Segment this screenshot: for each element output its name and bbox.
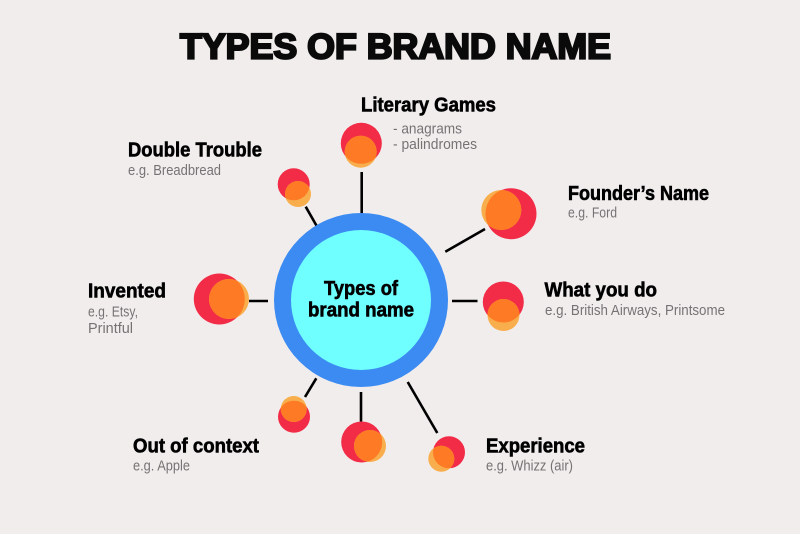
label: out of context: Out of context xyxy=(133,436,259,458)
label: double trouble: e.g. Breadbread xyxy=(128,162,221,179)
central hub xyxy=(274,213,448,387)
label: literary games xyxy=(361,95,496,153)
connector: what you do xyxy=(452,300,478,302)
connector: double trouble xyxy=(306,207,317,226)
label: experience: Experience xyxy=(486,436,585,458)
label: what you do: What you do xyxy=(544,280,657,302)
icon: double trouble circles xyxy=(278,168,311,207)
label: invented: Invented xyxy=(88,281,166,303)
label: literary games: Literary Games xyxy=(361,95,496,117)
label: invented: e.g. Etsy, xyxy=(88,304,138,321)
label: double trouble: Double Trouble xyxy=(128,140,262,162)
central hub: Types of xyxy=(324,278,398,300)
label: what you do xyxy=(544,280,725,319)
label: experience: e.g. Whizz (air) xyxy=(486,458,573,475)
connector: bottom xyxy=(360,392,362,422)
central hub: brand name xyxy=(308,300,414,322)
label: invented xyxy=(88,281,166,337)
label: founder's name xyxy=(568,183,709,222)
connector: invented xyxy=(249,300,268,302)
icon: bottom circles xyxy=(341,422,386,462)
label: founder's name: Founder’s Name xyxy=(568,183,709,205)
connector: out of context xyxy=(305,378,316,397)
label: founder's name: e.g. Ford xyxy=(568,205,617,222)
icon: literary games circles xyxy=(341,123,382,168)
label: literary games: - palindromes xyxy=(393,136,477,153)
label: out of context: e.g. Apple xyxy=(133,458,190,475)
connector: founder's name xyxy=(445,229,485,252)
label: experience xyxy=(486,436,585,475)
icon: experience circles xyxy=(428,436,465,472)
icon: founder's name circles xyxy=(481,188,536,239)
label: invented: Printful xyxy=(88,320,133,337)
connector: experience xyxy=(408,382,437,433)
label: what you do: e.g. British Airways, Printsome xyxy=(545,302,725,319)
icon: what you do circles xyxy=(483,282,524,331)
icon: invented circles xyxy=(194,274,249,324)
label: out of context xyxy=(133,436,259,475)
connector: literary games xyxy=(360,172,363,213)
title: TYPES OF BRAND NAME xyxy=(180,28,611,66)
label: double trouble xyxy=(128,140,262,179)
icon: out of context circles xyxy=(278,396,310,433)
label: literary games: - anagrams xyxy=(393,120,462,137)
